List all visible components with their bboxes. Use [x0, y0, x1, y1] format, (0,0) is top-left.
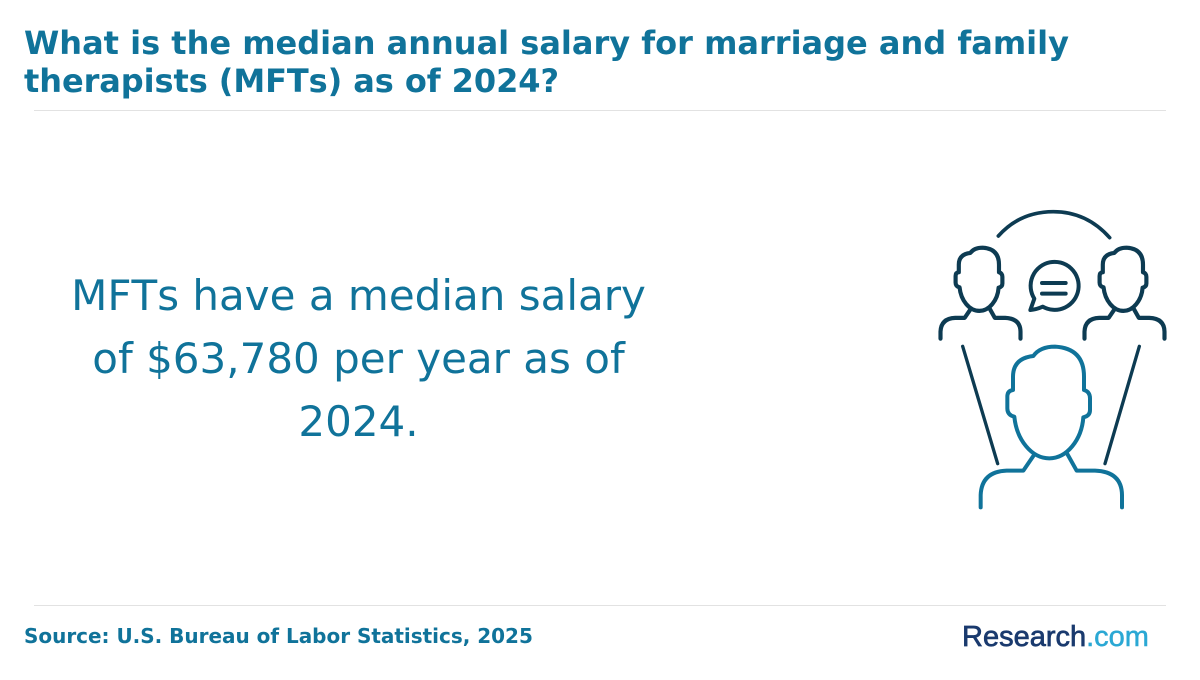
main statement	[71, 271, 646, 446]
icon: left client	[941, 248, 1020, 339]
icon: left perspective line	[963, 346, 998, 464]
main statement: 2024.	[298, 397, 419, 446]
logo: Research.com	[962, 621, 1149, 653]
icon: therapist	[981, 347, 1122, 507]
main statement: MFTs have a median salary	[71, 271, 646, 320]
icon: arc above clients	[998, 212, 1110, 238]
icon: right perspective line	[1105, 346, 1139, 464]
title: therapists (MFTs) as of 2024?	[24, 62, 559, 100]
main statement: of $63,780 per year as of	[92, 334, 625, 383]
title: What is the median annual salary for marriage and family	[24, 24, 1069, 62]
icon: right client	[1085, 248, 1164, 339]
source: Source: U.S. Bureau of Labor Statistics, 2025	[24, 624, 533, 648]
icon: speech bubble	[1030, 262, 1079, 310]
icon: therapy session with three people	[938, 210, 1167, 510]
title	[24, 24, 1069, 100]
